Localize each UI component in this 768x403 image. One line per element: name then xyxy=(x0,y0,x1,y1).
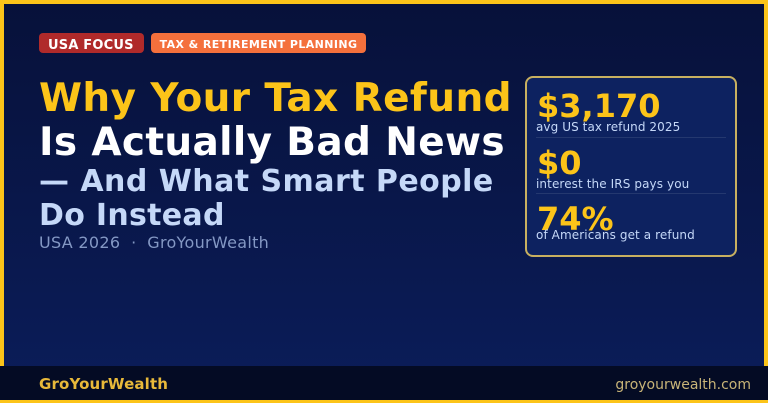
subtitle line 2: Do Instead xyxy=(39,198,225,233)
footer brand: GroYourWealth xyxy=(39,375,168,393)
badge: USA Focus xyxy=(38,33,144,53)
stat: average refund label: avg US tax refund 2025 xyxy=(536,120,680,134)
subtitle line 1: — And What Smart People xyxy=(39,164,494,199)
stat: IRS interest label: interest the IRS pays you xyxy=(536,177,689,191)
byline: USA 2026 · GroYourWealth xyxy=(39,233,269,252)
badge: USA Focus: USA FOCUS xyxy=(48,38,134,53)
footer bar xyxy=(0,366,768,400)
panel: key stats xyxy=(525,76,737,257)
badge: Tax and Retirement Planning xyxy=(151,33,366,53)
title line 1: Why Your Tax Refund xyxy=(39,76,512,121)
title line 2: Is Actually Bad News xyxy=(39,120,505,165)
stat: refund share value: 74% xyxy=(537,200,614,238)
footer URL: groyourwealth.com xyxy=(615,377,751,393)
stat: IRS interest value: $0 xyxy=(537,144,582,182)
stat: average refund value: $3,170 xyxy=(537,87,660,125)
stat: refund share label: of Americans get a refund xyxy=(536,228,695,242)
badge: Tax and Retirement Planning: TAX & RETIREMENT PLANNING xyxy=(160,38,357,51)
